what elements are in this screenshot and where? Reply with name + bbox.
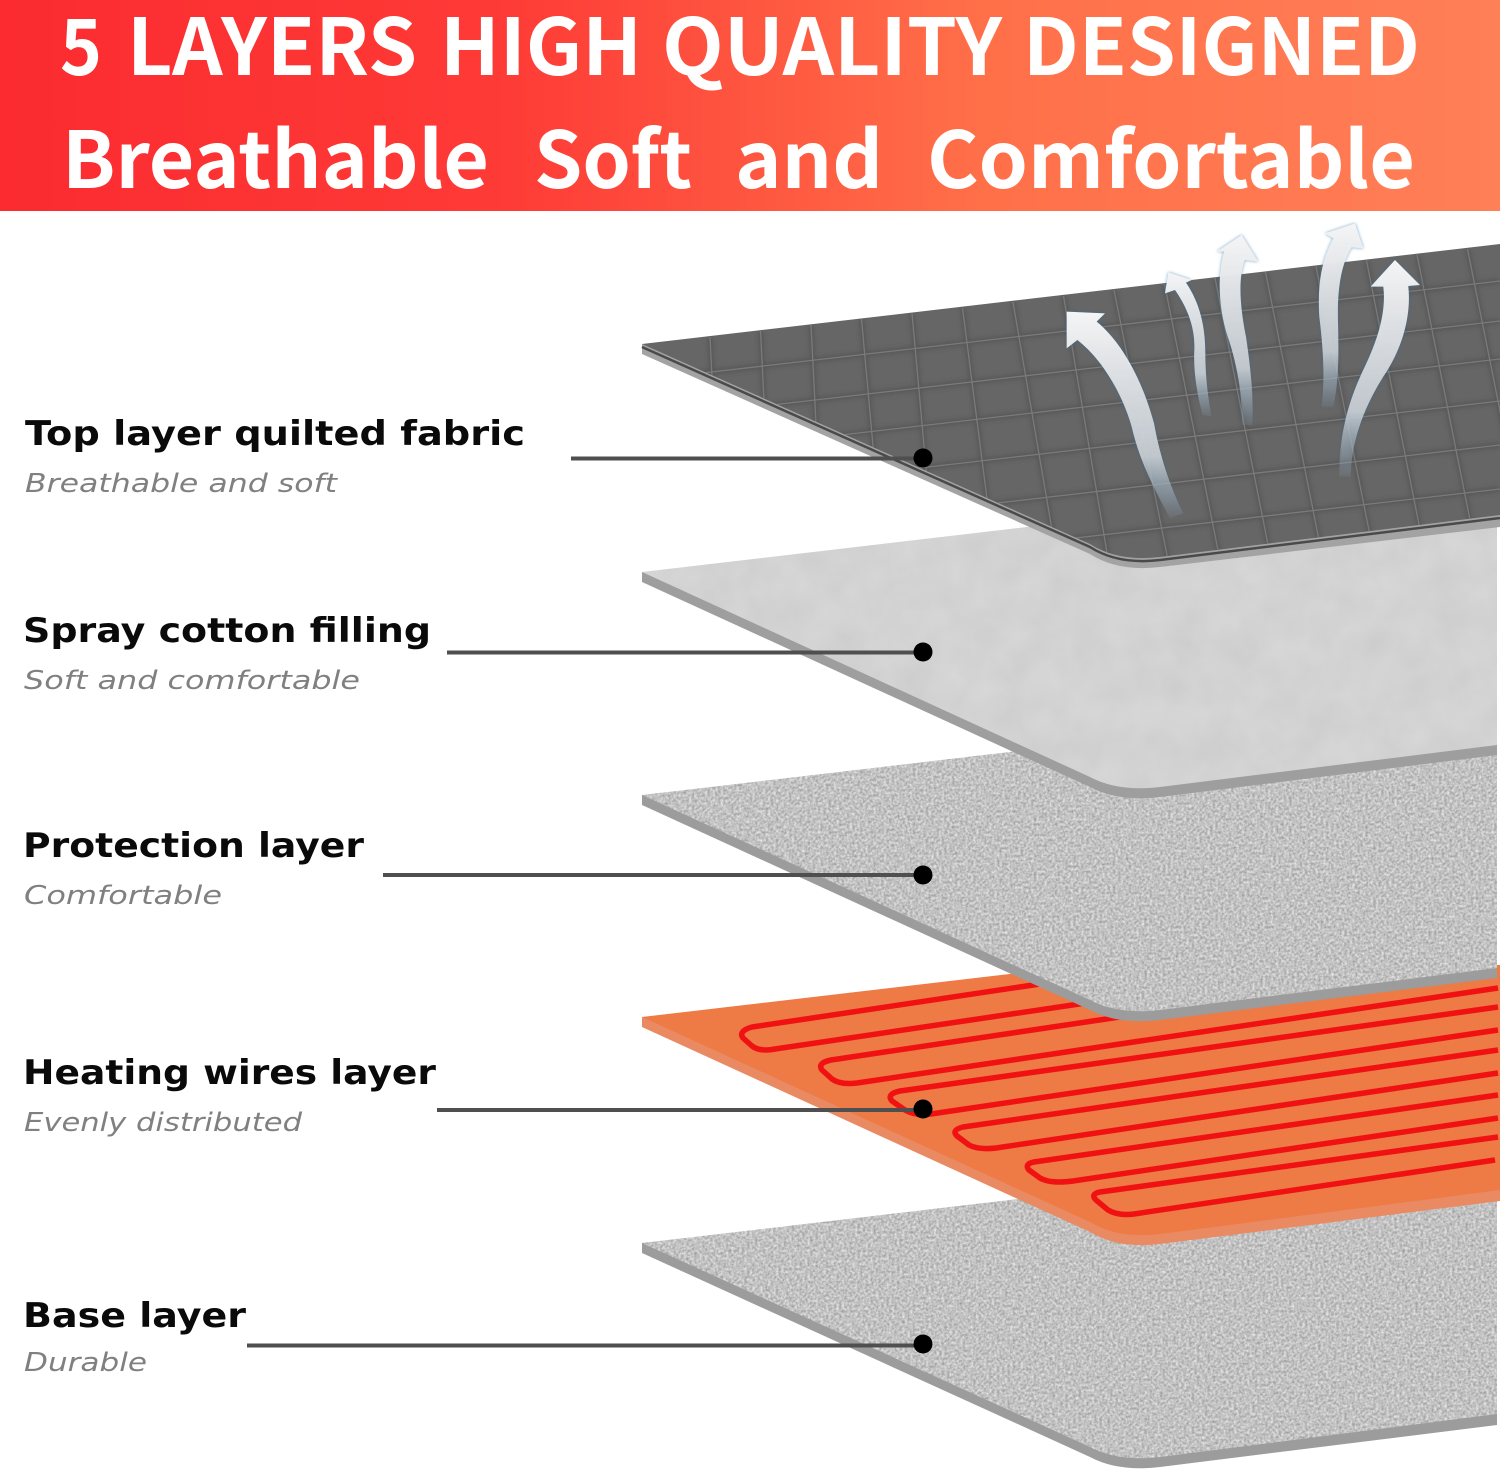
- layer 1: top quilted fabric sheet: [642, 222, 1500, 568]
- callout: protection layer: [23, 826, 932, 911]
- callout: heating wires layer: Evenly distributed: [24, 1108, 303, 1138]
- arrow 4: [1319, 223, 1363, 407]
- callout: top layer quilted fabric: [25, 414, 932, 499]
- headline line 2: Soft: [534, 99, 692, 211]
- callout: top layer quilted fabric: Top layer quilted fabric: [25, 414, 525, 454]
- callout: base layer: Base layer: [23, 1296, 246, 1336]
- callout: heating wires layer: Heating wires layer: [23, 1053, 436, 1093]
- headline line 2: and: [735, 99, 883, 211]
- callout: base layer: Durable: [24, 1348, 147, 1378]
- arrow 5: [1339, 260, 1420, 477]
- layer 2: spray cotton sheet: [642, 472, 1497, 798]
- arrow 3: [1217, 235, 1258, 425]
- quilting stitches: [702, 249, 1500, 556]
- layer 5: base layer sheet: [642, 1143, 1497, 1468]
- callout: base layer: [23, 1296, 932, 1378]
- headline line 2: Comfortable: [927, 99, 1415, 211]
- arrow 1: [1067, 312, 1183, 518]
- callout: protection layer: Comfortable: [24, 881, 222, 911]
- callout: spray cotton filling: Soft and comfortable: [24, 666, 360, 696]
- title banner: [0, 0, 1500, 211]
- quilted edge seam: [642, 347, 1500, 561]
- layer 3: protection layer sheet: [642, 695, 1497, 1021]
- heating wire: serpentine: [821, 988, 1498, 1214]
- headline line 2: [62, 99, 1415, 211]
- airflow arrows: [1067, 223, 1420, 518]
- heating wire: first loop: [742, 975, 1140, 1050]
- headline line 2: Breathable: [62, 99, 489, 211]
- callout: spray cotton filling: [23, 611, 932, 696]
- arrow 2: [1165, 272, 1212, 417]
- callout: protection layer: Protection layer: [23, 826, 364, 866]
- callout: top layer quilted fabric: Breathable and soft: [25, 469, 338, 499]
- headline line 1: [60, 0, 1420, 98]
- layer 4: heating wires sheet: [642, 917, 1500, 1245]
- callout: heating wires layer: [23, 1053, 932, 1138]
- callout: spray cotton filling: Spray cotton filling: [23, 611, 431, 651]
